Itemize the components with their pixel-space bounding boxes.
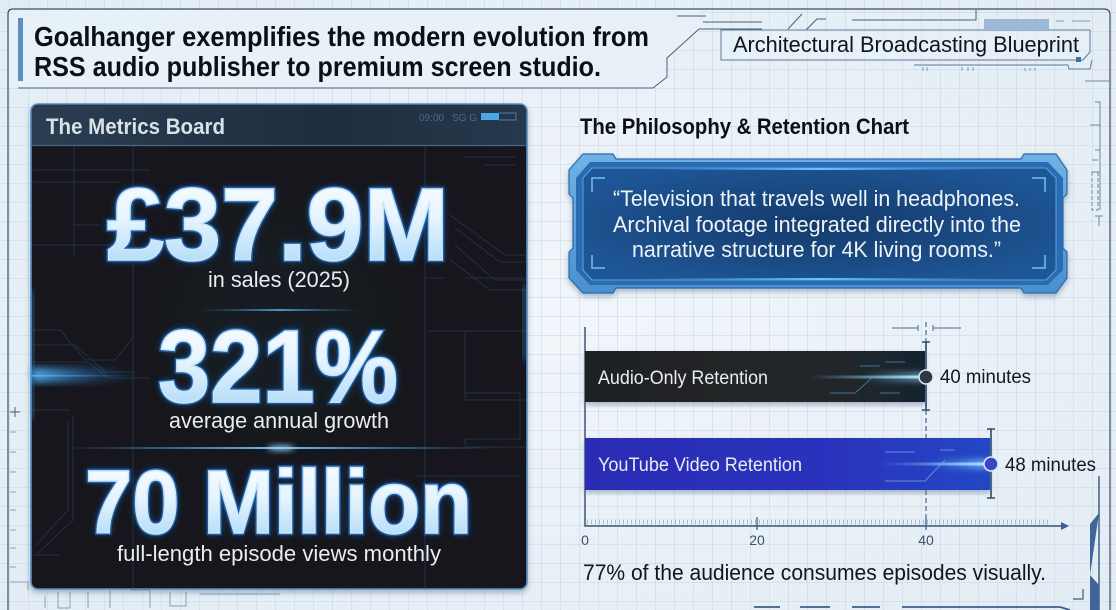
marker: 40 minutes (919, 342, 1031, 410)
title: RSS audio publisher to premium screen studio. (34, 51, 601, 82)
quote text: narrative structure for 4K living rooms.” (632, 237, 1001, 262)
title: Goalhanger exemplifies the modern evolution from (34, 21, 649, 52)
bar: youtube video (585, 438, 990, 490)
metric: sales: £37.9M (107, 167, 449, 282)
divider (200, 309, 360, 311)
bottom right frame decoration (754, 476, 1099, 610)
metric: growth: 321% (158, 309, 398, 424)
panel header bar (32, 105, 526, 146)
corner brackets (592, 178, 1045, 268)
panel: metrics board (31, 104, 527, 590)
axis labels (581, 532, 934, 548)
axis labels: 0 (581, 532, 589, 548)
metric: sales: £37.9M (107, 167, 449, 282)
panel: quote (569, 154, 1067, 293)
chart: retention (581, 322, 1096, 548)
title (34, 21, 649, 82)
metric: views: 70 Million (85, 453, 472, 553)
metric: views: full-length episode views monthly (117, 541, 441, 566)
metric: growth: 321% (158, 309, 398, 424)
marker: 48 minutes (984, 429, 1096, 498)
bar: youtube video: YouTube Video Retention (598, 455, 802, 476)
axis labels: 20 (749, 532, 765, 548)
marker: 40 minutes: 40 minutes (940, 367, 1031, 388)
edge glows (31, 285, 526, 420)
header panel (9, 10, 976, 88)
circuit traces (33, 146, 526, 590)
metric: views: 70 Million (85, 453, 472, 553)
badge: Architectural Broadcasting Blueprint: Architectural Broadcasting Blueprint (733, 32, 1079, 57)
caption: audience: 77% of the audience consumes episodes visually. (583, 560, 1046, 585)
metric: growth: average annual growth (169, 408, 389, 433)
right side ruler decoration (1085, 81, 1109, 226)
panel header bar: The Metrics Board (46, 114, 225, 139)
metric: growth: 321% (158, 309, 398, 424)
quote text: Archival footage integrated directly into the (613, 212, 1021, 237)
badge: Architectural Broadcasting Blueprint (721, 19, 1092, 71)
accent bar (18, 18, 23, 81)
divider (60, 446, 500, 450)
panel header bar: SG G (452, 113, 477, 124)
marker: 48 minutes: 48 minutes (1005, 455, 1096, 476)
quote text: “Television that travels well in headphones. (613, 186, 1020, 211)
metric: sales: £37.9M (107, 167, 449, 282)
reference line at 40 (892, 322, 961, 526)
bar: audio-only (585, 351, 925, 402)
metric: sales: in sales (2025) (208, 267, 350, 292)
quote text (613, 186, 1021, 262)
axes (585, 327, 1069, 530)
panel header bar: 09:00 (419, 113, 444, 124)
bar: audio-only: Audio-Only Retention (598, 368, 768, 389)
metric: views: 70 Million (85, 453, 472, 553)
left side ruler decoration (10, 407, 280, 608)
heading: philosophy and retention chart: The Philosophy & Retention Chart (580, 114, 910, 139)
axis labels: 40 (918, 532, 934, 548)
